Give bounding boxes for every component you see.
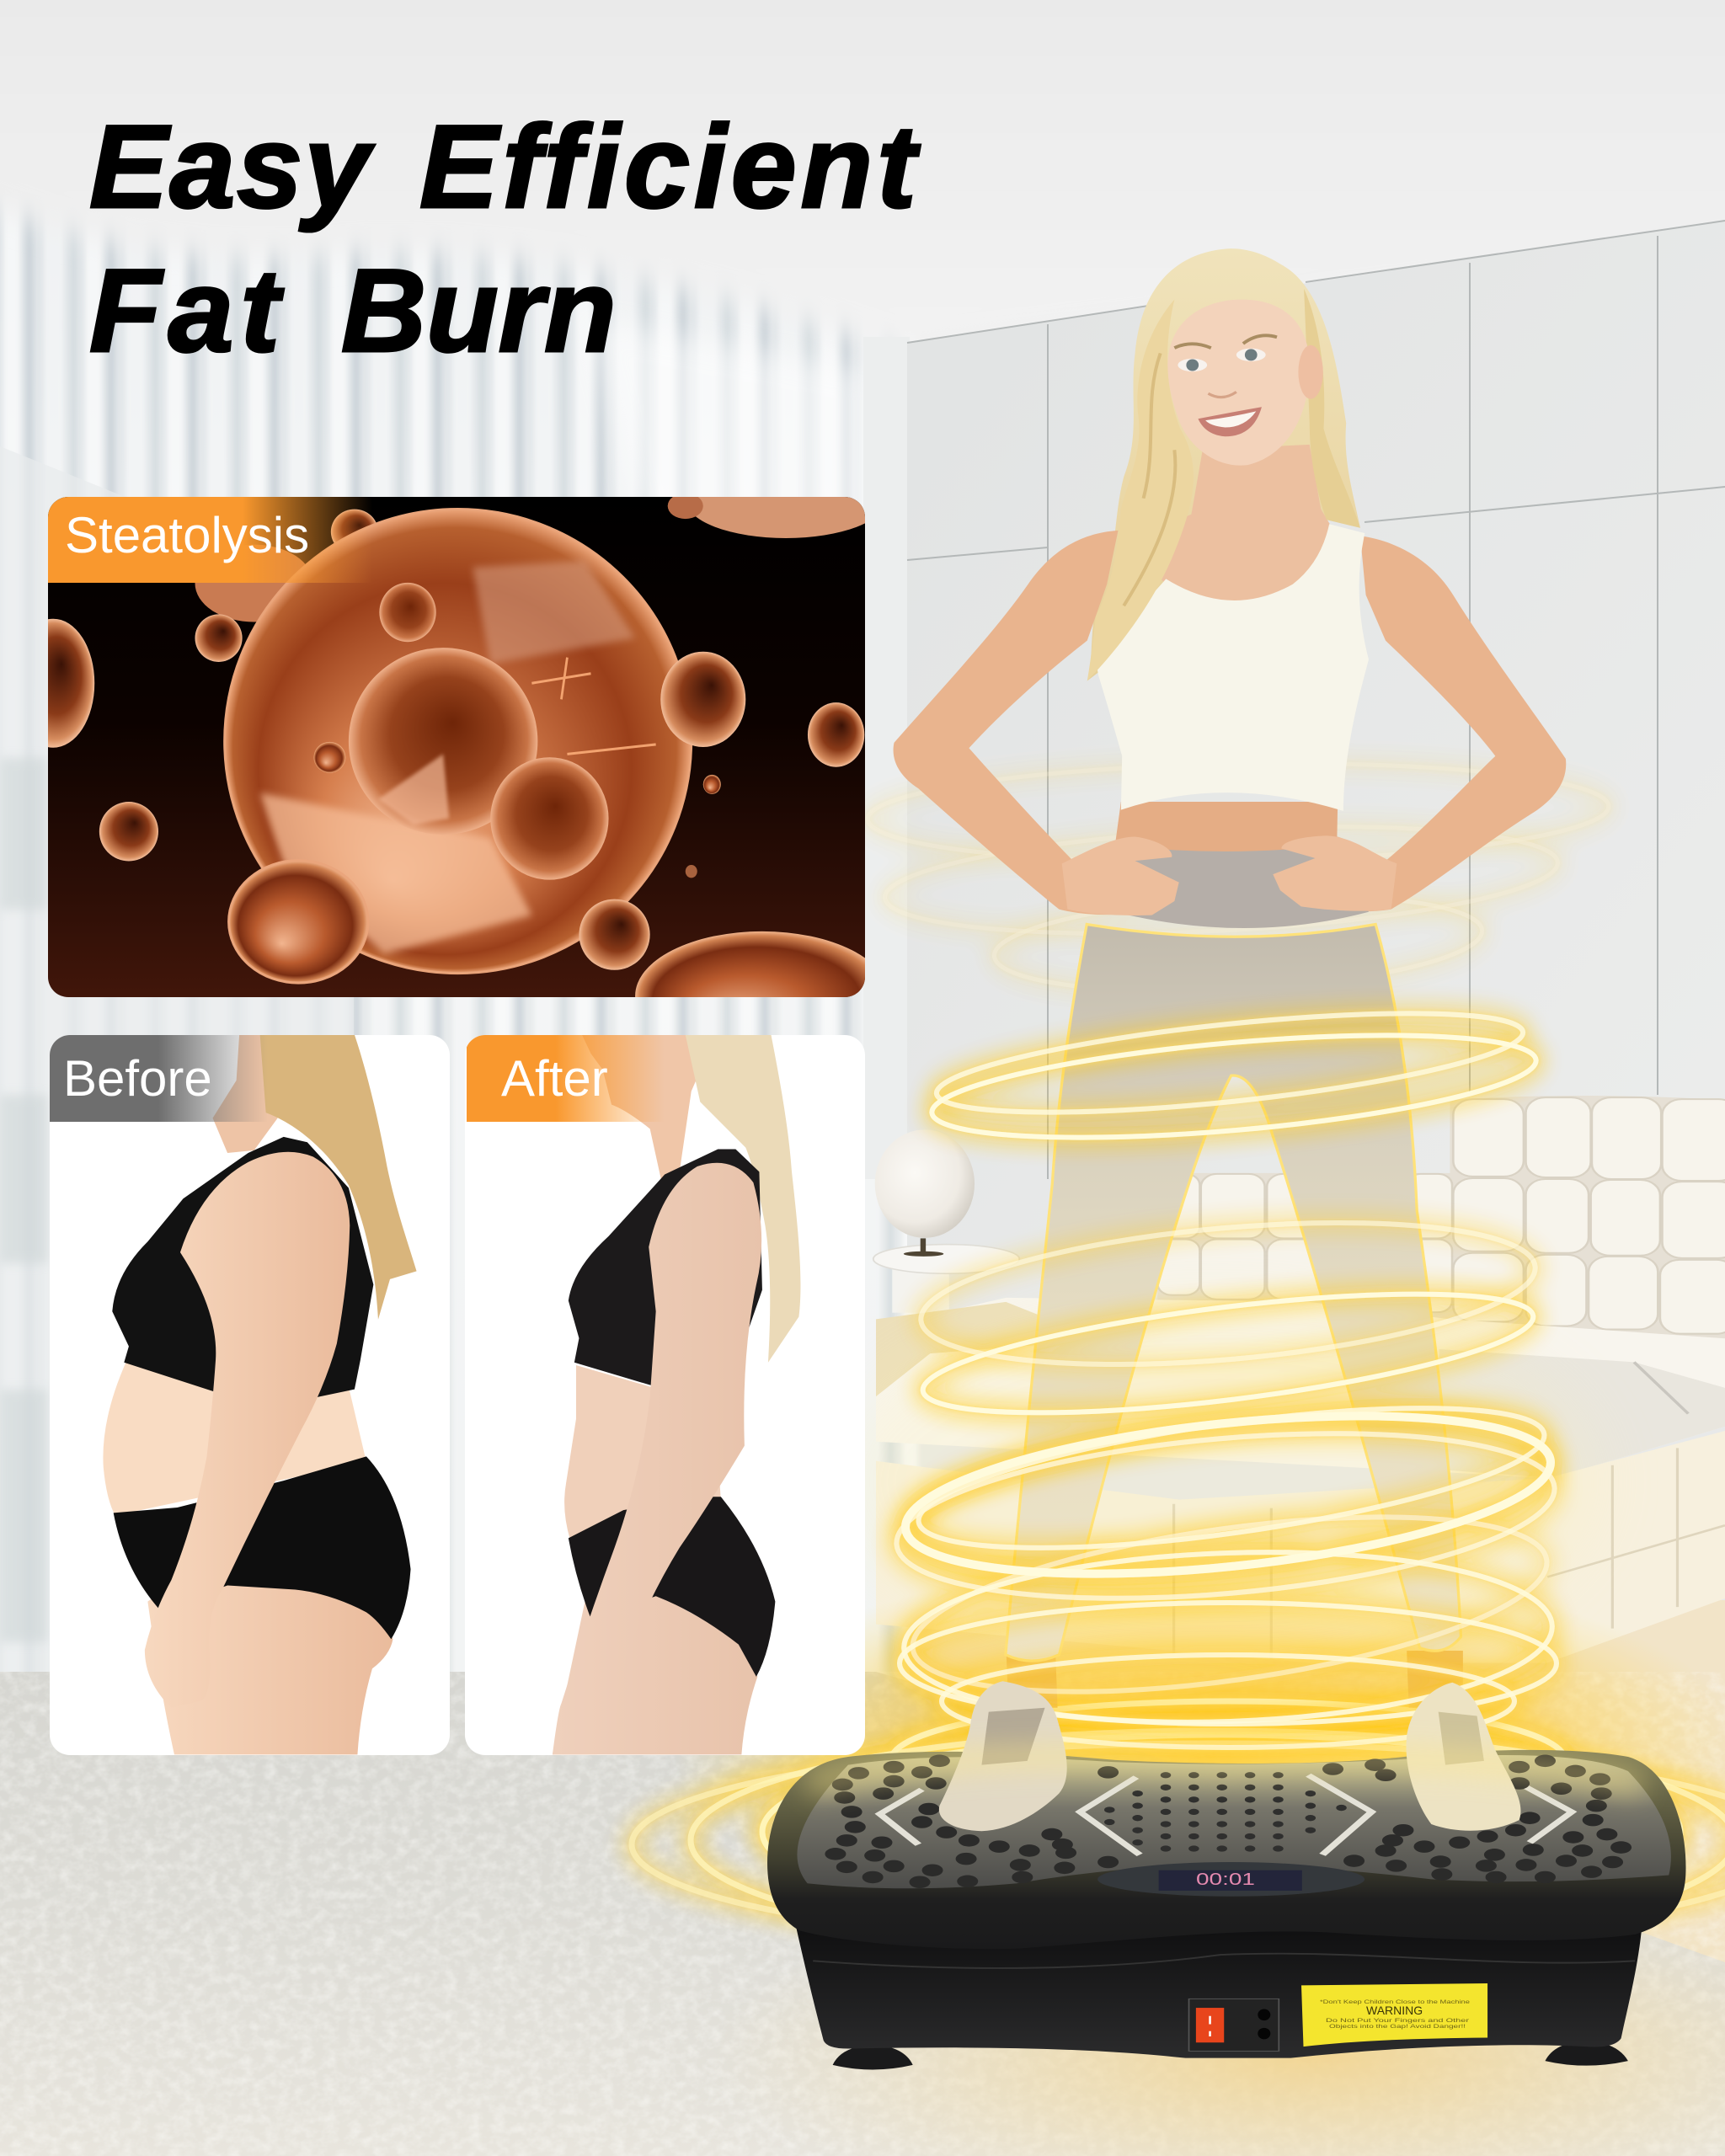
shoes: [939, 1681, 1067, 1831]
ceiling: [0, 0, 1725, 354]
title: Easy: [89, 100, 375, 232]
briefs: [114, 1456, 411, 1639]
hair back: [1087, 248, 1360, 681]
arm: [553, 1163, 761, 1754]
massage nubs centre: [1109, 1775, 1342, 1857]
brows, eyes and nose: [1174, 335, 1277, 348]
woman on platform: [894, 248, 1566, 1708]
hair: [260, 1035, 417, 1320]
neck and chest: [1124, 445, 1332, 608]
left arm: [894, 531, 1179, 915]
vibration plate: [767, 1681, 1686, 2069]
right arm: [1275, 536, 1566, 911]
floor: [910, 1600, 1725, 2105]
panel: before: [49, 1035, 450, 1755]
head and neck: [213, 1035, 278, 1153]
console timer: 00:01: [1196, 1870, 1255, 1889]
massage nubs sides: [836, 1761, 1621, 1882]
warning text: WARNING: [1366, 2004, 1423, 2017]
rug: [0, 1672, 1725, 2156]
label strip: before: [49, 1035, 268, 1122]
wall panels: [863, 221, 1725, 1263]
hair: [686, 1035, 800, 1363]
ankles: [1007, 1651, 1463, 1708]
ear: [1298, 345, 1323, 399]
mouth: [1198, 407, 1262, 436]
hands: [1062, 836, 1179, 915]
belly: [103, 1360, 366, 1516]
panel: steatolysis: [48, 497, 865, 997]
warning text: [1320, 1999, 1471, 2030]
title: Burn: [341, 244, 617, 376]
chevrons: [879, 1775, 1572, 1854]
control console: [1097, 1862, 1365, 1897]
briefs: [569, 1497, 775, 1677]
label strip: after: [467, 1035, 665, 1122]
bed base: [876, 1431, 1725, 1662]
curtains: [0, 194, 918, 1693]
bed: [876, 1096, 1725, 1662]
warning text: Objects into the Gap! Avoid Danger!!: [1329, 2024, 1466, 2030]
sports bra: [569, 1150, 762, 1395]
energy rings around platform: [632, 1701, 1725, 1950]
energy rings around legs: [889, 994, 1562, 1748]
throw blanket: [876, 1302, 1049, 1396]
tank top: [1092, 524, 1369, 811]
upper body: [894, 248, 1566, 928]
head and neck: [582, 1035, 703, 1182]
ambient yellow glow: [674, 1297, 1725, 1950]
upper rim: [767, 1750, 1686, 1949]
hair front strands: [1087, 300, 1194, 681]
warning text: *Don't Keep Children Close to the Machine: [1320, 1999, 1471, 2005]
title: Fat: [89, 244, 286, 376]
legs: [147, 1580, 393, 1754]
fat bubbles: [48, 497, 865, 997]
deck: [797, 1755, 1671, 1888]
headboard: [1157, 1096, 1725, 1345]
switch panel: [1189, 1999, 1279, 2051]
legs: [553, 1593, 757, 1754]
label: before text: Before: [63, 1050, 212, 1107]
label: after text: After: [501, 1050, 608, 1107]
light flare: [531, 658, 656, 754]
waist: [564, 1365, 724, 1540]
sports bra: [112, 1137, 373, 1397]
faint energy rings behind torso: [867, 757, 1610, 1002]
arm: [145, 1152, 350, 1708]
leggings: [1006, 925, 1461, 1661]
mattress: [876, 1298, 1725, 1478]
midriff: [1113, 802, 1338, 863]
warning label: [1301, 1983, 1487, 2047]
label strip: steatolysis: [48, 497, 372, 583]
label: steatolysis text: Steatolysis: [65, 507, 309, 563]
title: Efficient: [419, 100, 921, 232]
panel: after: [465, 1035, 865, 1755]
suction feet: [833, 2041, 1628, 2069]
title: [89, 100, 921, 376]
shoe detail: [981, 1708, 1045, 1765]
side table with globe lamp: [873, 1129, 1019, 1313]
waistband: [1094, 845, 1369, 928]
lower housing: [795, 1924, 1642, 2058]
large central droplet: [225, 510, 692, 974]
deck glow: [809, 1758, 1642, 1785]
face: [1167, 300, 1310, 466]
warning text: Do Not Put Your Fingers and Other: [1326, 2018, 1470, 2024]
